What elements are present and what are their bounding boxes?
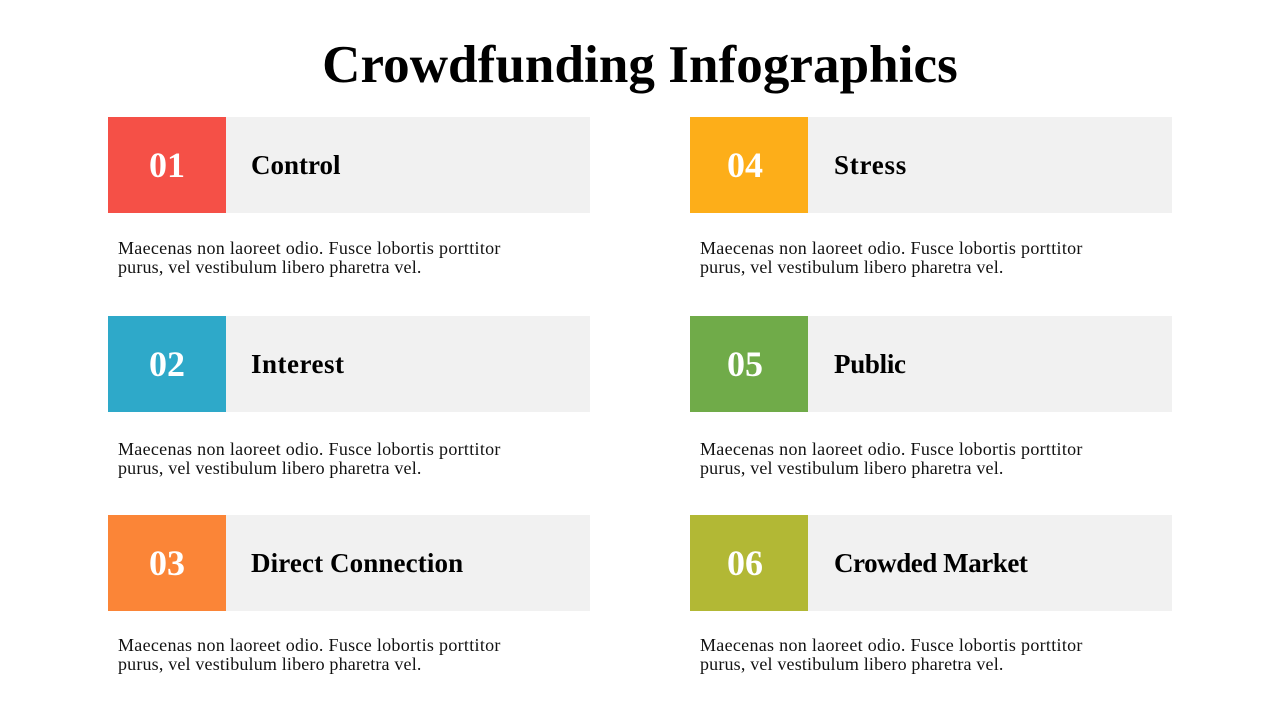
heading: Control: Control	[251, 150, 341, 180]
panel: 03 Direct Connection	[108, 515, 590, 611]
text block: 02: purus, vel vestibulum libero pharetra vel.	[118, 458, 422, 478]
heading: Interest: Interest	[251, 349, 344, 379]
text block: 02	[118, 439, 501, 478]
number 05: 05	[727, 344, 763, 384]
number 01	[108, 117, 226, 213]
text block: 01: purus, vel vestibulum libero pharetra vel.	[118, 257, 422, 277]
text block: 05	[700, 439, 1083, 478]
number 05	[690, 316, 808, 412]
heading: Public: Public	[834, 349, 906, 379]
text block: 06: purus, vel vestibulum libero pharetra vel.	[700, 654, 1004, 674]
number 06: 06	[727, 543, 763, 583]
number 01: 01	[149, 145, 185, 185]
number 06	[690, 515, 808, 611]
panel: 01 Control	[108, 117, 590, 213]
text block: 04: purus, vel vestibulum libero pharetra vel.	[700, 257, 1004, 277]
number 03: 03	[149, 543, 185, 583]
panel: 04 Stress	[690, 117, 1172, 213]
heading: Direct Connection: Direct Connection	[251, 548, 463, 578]
text block: 01	[118, 238, 501, 277]
text block: 03: Maecenas non laoreet odio. Fusce lobortis porttitor	[118, 635, 501, 655]
number 04: 04	[727, 145, 763, 185]
number 03	[108, 515, 226, 611]
heading: Crowded Market: Crowded Market	[834, 548, 1027, 578]
text block: 04	[700, 238, 1083, 277]
title: Crowdfunding Infographics	[322, 36, 958, 94]
text block: 03	[118, 635, 501, 674]
text block: 03: purus, vel vestibulum libero pharetra vel.	[118, 654, 422, 674]
panel: 05 Public	[690, 316, 1172, 412]
panel: 06 Crowded Market	[690, 515, 1172, 611]
text block: 04: Maecenas non laoreet odio. Fusce lobortis porttitor	[700, 238, 1083, 258]
number 04	[690, 117, 808, 213]
number 02	[108, 316, 226, 412]
text block: 01: Maecenas non laoreet odio. Fusce lobortis porttitor	[118, 238, 501, 258]
text block: 02: Maecenas non laoreet odio. Fusce lobortis porttitor	[118, 439, 501, 459]
panel: 02 Interest	[108, 316, 590, 412]
text block: 06	[700, 635, 1083, 674]
text block: 06: Maecenas non laoreet odio. Fusce lobortis porttitor	[700, 635, 1083, 655]
text block: 05: Maecenas non laoreet odio. Fusce lobortis porttitor	[700, 439, 1083, 459]
text block: 05: purus, vel vestibulum libero pharetra vel.	[700, 458, 1004, 478]
heading: Stress: Stress	[834, 150, 907, 180]
number 02: 02	[149, 344, 185, 384]
